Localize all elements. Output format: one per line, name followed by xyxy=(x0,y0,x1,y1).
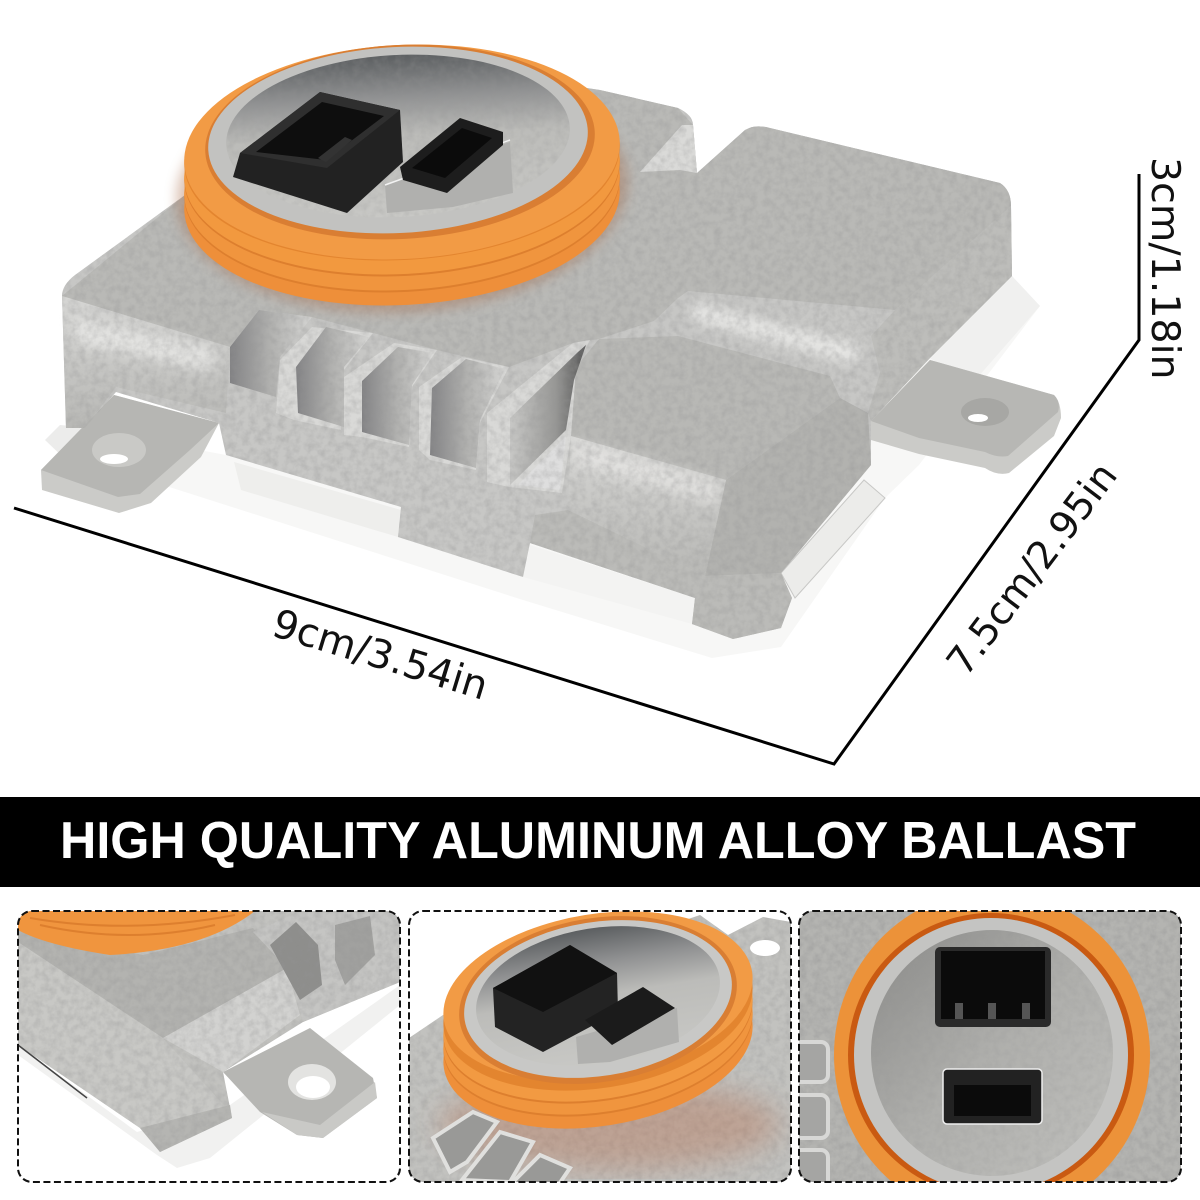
cooling fins xyxy=(230,310,590,493)
large connector xyxy=(493,945,618,1052)
casting xyxy=(18,911,400,1152)
left mounting tab xyxy=(41,395,219,513)
connector: small xyxy=(385,118,513,213)
fins xyxy=(433,1112,570,1190)
detail panel 1: mounting tab xyxy=(18,911,400,1182)
small rear block highlight xyxy=(640,125,697,173)
base plate xyxy=(45,276,1040,658)
title banner: HIGH QUALITY ALUMINUM ALLOY BALLAST xyxy=(60,812,1136,870)
orange seal ring xyxy=(170,34,634,324)
casting xyxy=(409,915,791,1182)
connector: large xyxy=(233,92,403,213)
connector 1 xyxy=(935,947,1051,1027)
fins xyxy=(799,1040,830,1182)
right mounting tab xyxy=(871,360,1061,474)
main body casting xyxy=(62,60,1012,639)
label: width: 9cm/3.54in xyxy=(267,601,493,710)
label: depth: 7.5cm/2.95in xyxy=(938,454,1127,684)
plate xyxy=(18,985,400,1168)
panel 2 border xyxy=(409,911,791,1182)
panel 1 border xyxy=(18,911,400,1182)
product photo: ballast xyxy=(41,34,1061,658)
raised trench between blocks xyxy=(654,291,880,376)
tab xyxy=(223,1028,377,1138)
label: height: 3cm/1.18in xyxy=(1142,157,1188,380)
title banner xyxy=(0,797,1200,887)
dimension line xyxy=(14,174,1139,764)
lower right block xyxy=(530,336,871,639)
seal xyxy=(443,1020,753,1129)
panel 3 border xyxy=(799,911,1181,1182)
top surface xyxy=(62,60,1011,367)
seal xyxy=(18,911,255,955)
small connector xyxy=(576,1008,679,1064)
metal grain xyxy=(62,60,1012,639)
seal xyxy=(834,911,1150,1182)
big block side xyxy=(868,206,1012,421)
front left face xyxy=(62,296,230,428)
rust halo xyxy=(440,1080,780,1170)
detail panel 3: top view of connectors xyxy=(799,911,1181,1182)
connector 2 xyxy=(943,1069,1042,1124)
detail panel 2: connector ring xyxy=(409,891,791,1190)
